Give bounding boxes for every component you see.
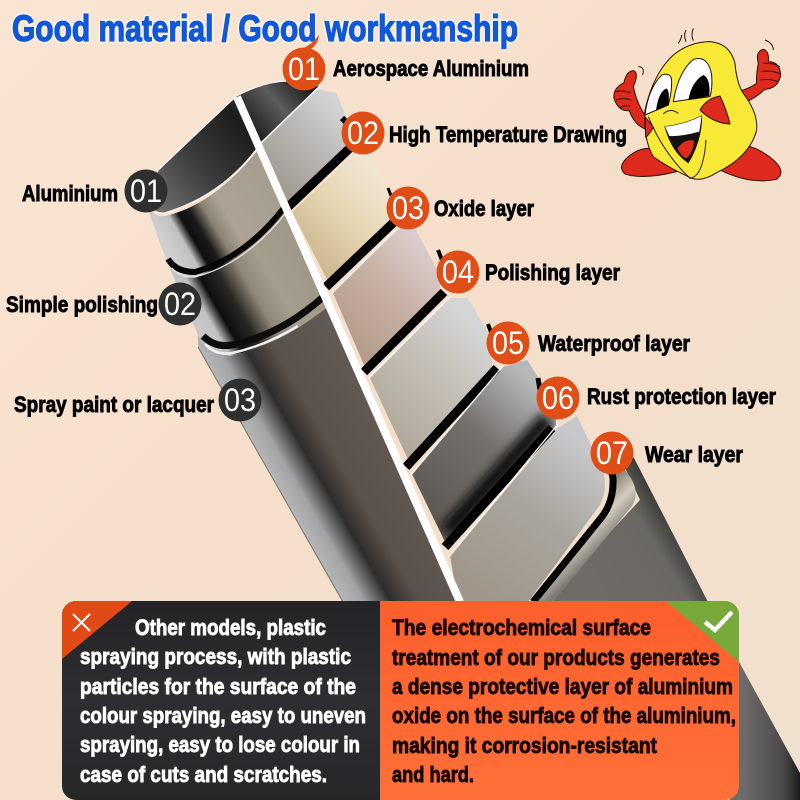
mouth — [665, 116, 702, 163]
swoosh accent above marker 01 — [304, 35, 319, 49]
label: 04 Polishing layer — [436, 250, 620, 294]
label: 02 Simple polishing: 02 — [164, 286, 196, 322]
label: 02 High Temperature Drawing: 02 — [347, 115, 379, 151]
label: 03 Oxide layer: Oxide layer — [434, 196, 534, 221]
label: 02 Simple polishing — [6, 282, 202, 326]
label: 04 Polishing layer: Polishing layer — [485, 260, 620, 285]
text block: other models: colour spraying, easy to uneven — [80, 703, 366, 728]
corner flag: cross — [62, 601, 132, 659]
text block: other models: spraying process, with plastic — [80, 644, 351, 669]
outer wear layer body — [545, 440, 708, 602]
layer 01 band — [258, 89, 352, 210]
label: 02 High Temperature Drawing — [342, 112, 627, 154]
label: 03 Spray paint or lacquer: Spray paint or lacquer — [14, 392, 214, 417]
label: 02 High Temperature Drawing: High Temperature Drawing — [389, 122, 627, 147]
label: 05 Waterproof layer — [486, 322, 690, 364]
text block: electrochemical treatment: a dense protective layer of aluminium — [392, 674, 733, 699]
left eye — [645, 74, 672, 115]
icon: cross — [73, 614, 90, 631]
right foot — [720, 147, 781, 181]
text block: electrochemical treatment: The electrochemical surface — [392, 615, 651, 640]
left arm and hand — [614, 71, 650, 130]
label: 07 Wear layer — [590, 432, 743, 474]
left polishing section — [167, 212, 330, 356]
text block: electrochemical treatment: oxide on the surface of the aluminium, — [392, 703, 736, 728]
panel: other models — [62, 601, 380, 800]
label: 06 Rust protection layer: 06 — [542, 380, 574, 416]
label: 01 Aluminium: 01 — [130, 173, 162, 209]
text block: electrochemical treatment: making it corrosion-resistant — [392, 733, 657, 758]
text block: electrochemical treatment — [392, 615, 736, 787]
body — [645, 42, 757, 179]
label: 01 Aerospace Aluminium: Aerospace Aluminium — [333, 56, 529, 81]
left foot — [622, 148, 677, 176]
white diagonal divider — [237, 97, 460, 602]
label: 03 Spray paint or lacquer — [14, 378, 262, 422]
label: 05 Waterproof layer: 05 — [492, 325, 524, 361]
label: 03 Oxide layer — [386, 186, 534, 230]
label: 01 Aerospace Aluminium — [282, 48, 529, 90]
right arm and hand — [738, 49, 781, 103]
label: 06 Rust protection layer — [536, 376, 776, 420]
layer 04 band — [370, 298, 492, 466]
label: 07 Wear layer: 07 — [596, 435, 628, 471]
title: Good material / Good workmanship — [12, 8, 518, 49]
text block: electrochemical treatment: and hard. — [392, 762, 474, 787]
text block: other models: spraying, easy to lose colour in — [80, 732, 360, 757]
text block: other models: particles for the surface of the — [80, 674, 356, 699]
label: 04 Polishing layer: 04 — [442, 254, 474, 290]
right eye — [673, 59, 712, 102]
label: 02 Simple polishing: Simple polishing — [6, 292, 158, 317]
layer 06 band — [450, 416, 605, 602]
layer 05 band — [412, 360, 556, 546]
rim of wear layer — [530, 470, 636, 602]
label: 03 Oxide layer: 03 — [392, 190, 424, 226]
text block: other models: case of cuts and scratches. — [80, 762, 327, 787]
chin and nose lines — [648, 117, 706, 178]
text block: other models: Other models, plastic — [135, 615, 326, 640]
illustration: layered aluminium tube — [146, 81, 800, 800]
text block: electrochemical treatment: treatment of our products generates — [392, 645, 720, 670]
cheeks — [700, 96, 730, 124]
panel: comparison — [62, 601, 739, 800]
left aluminium section — [146, 145, 288, 277]
panel: our product — [380, 601, 739, 800]
label: 05 Waterproof layer: Waterproof layer — [538, 331, 690, 356]
layer 03 band — [333, 228, 440, 372]
label: 01 Aluminium: Aluminium — [22, 181, 118, 206]
label: 03 Spray paint or lacquer: 03 — [224, 382, 256, 418]
icon: tick — [705, 612, 732, 630]
label: 07 Wear layer: Wear layer — [645, 442, 743, 467]
corner flag: tick — [666, 601, 739, 662]
text block: other models — [80, 615, 366, 787]
label: 01 Aluminium — [22, 170, 168, 212]
tube opening — [146, 81, 320, 213]
layer 02 band — [292, 150, 392, 285]
icon: thumbs-up mascot — [614, 28, 781, 181]
label: 01 Aerospace Aluminium: 01 — [288, 51, 320, 87]
left paint body — [198, 305, 462, 602]
